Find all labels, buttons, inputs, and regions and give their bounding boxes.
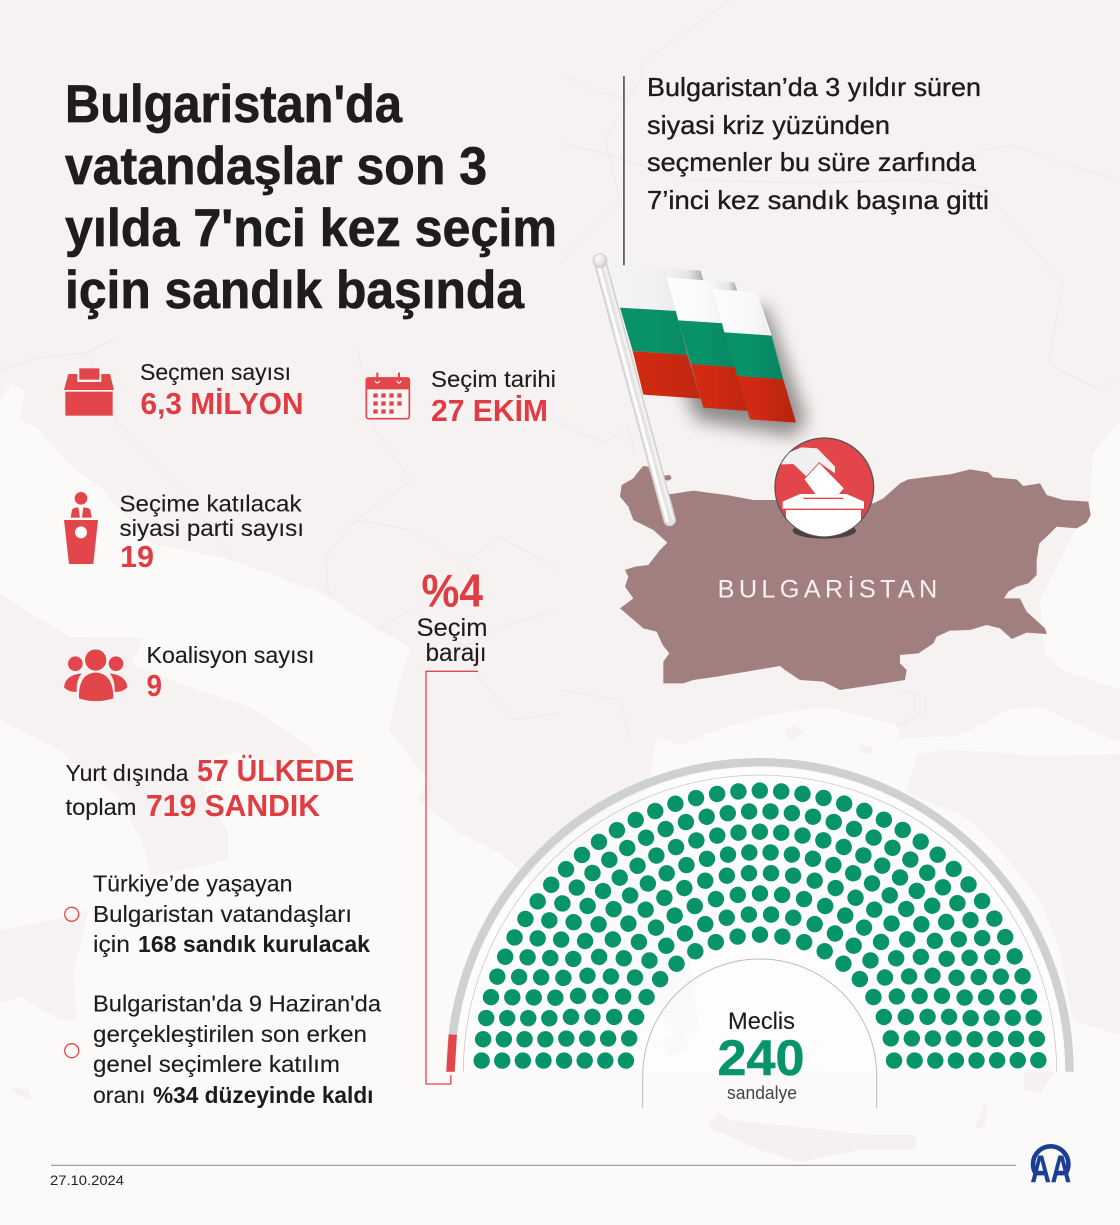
- note: turnout: gerçekleştirilen son erken: [93, 1021, 367, 1047]
- seat total: [718, 1008, 804, 1103]
- seat dots: [482, 791, 1038, 1061]
- icon: AA logo: AA: [1030, 1149, 1071, 1191]
- chart: parliament seats: [446, 762, 1070, 1108]
- intro text block: siyasi kriz yüzünden: [647, 110, 890, 140]
- stat: parties: 19: [120, 539, 154, 574]
- note: Türkiye ballot boxes: 168 sandık kurulacak: [138, 931, 370, 957]
- note: turnout: [65, 990, 381, 1108]
- date: 27.10.2024: [50, 1173, 125, 1188]
- title: vatandaşlar son 3: [65, 137, 487, 196]
- stat: election date: 27 EKİM: [431, 393, 548, 428]
- note: turnout: oranı: [93, 1082, 146, 1108]
- note: Türkiye ballot boxes: için: [93, 931, 130, 957]
- note: Türkiye ballot boxes: Bulgaristan vatandaşları: [93, 901, 352, 927]
- callout: election threshold: barajı: [426, 639, 486, 667]
- intro text block: 7’inci kez sandık başına gitti: [647, 185, 989, 215]
- callout: election threshold: [416, 564, 488, 1084]
- note: turnout: %34 düzeyinde kaldı: [153, 1082, 374, 1108]
- callout: election threshold: %4: [422, 564, 483, 616]
- stat: parties: [64, 490, 304, 574]
- note: turnout: Bulgaristan'da 9 Haziran'da: [93, 990, 381, 1016]
- stat: voters: 6,3 MİLYON: [140, 386, 304, 421]
- icon: podium: [64, 492, 98, 564]
- stat: parties: Seçime katılacak: [120, 490, 302, 516]
- map label: BULGARİSTAN: [718, 574, 937, 603]
- title: için sandık başında: [65, 261, 524, 320]
- stat: voters: Seçmen sayısı: [140, 359, 291, 385]
- icon: ballot box: [64, 368, 114, 416]
- flag cloth: [608, 264, 796, 423]
- stat: abroad ballot boxes: 57 ÜLKEDE: [197, 753, 354, 788]
- bullet: [65, 907, 79, 921]
- icon: people: [64, 648, 127, 701]
- intro text block: Bulgaristan’da 3 yıldır süren: [647, 72, 981, 102]
- stat: abroad ballot boxes: 719 SANDIK: [146, 788, 321, 823]
- stat: abroad ballot boxes: toplam: [66, 794, 136, 820]
- stat: election date: [366, 366, 556, 428]
- intro text block: seçmenler bu süre zarfında: [647, 147, 977, 177]
- note: turnout: genel seçimlere katılım: [93, 1051, 340, 1077]
- map: Bulgaria: [620, 466, 1091, 690]
- stat: coalitions: Koalisyon sayısı: [146, 642, 314, 668]
- outer arc: [450, 762, 1070, 1072]
- icon: calendar: [366, 373, 410, 419]
- stat: coalitions: [64, 642, 314, 703]
- intro text block: [623, 72, 989, 266]
- title: [65, 75, 557, 320]
- stat: abroad ballot boxes: [66, 753, 354, 823]
- stat: election date: Seçim tarihi: [431, 366, 556, 392]
- title: yılda 7'nci kez seçim: [65, 199, 557, 258]
- callout: election threshold: Seçim: [416, 614, 488, 642]
- threshold segment: [446, 1034, 457, 1072]
- note: Türkiye ballot boxes: [65, 870, 370, 957]
- seat total: Meclis: [728, 1008, 795, 1035]
- stat: abroad ballot boxes: Yurt dışında: [66, 760, 189, 786]
- stat: parties: siyasi parti sayısı: [120, 515, 304, 541]
- inner arc: [643, 959, 877, 1108]
- seat total: 240: [718, 1030, 804, 1086]
- footer rule: [51, 1165, 1016, 1166]
- flag pole: [593, 254, 673, 521]
- note: Türkiye ballot boxes: Türkiye’de yaşayan: [93, 870, 292, 896]
- bracket: [426, 671, 478, 1084]
- bullet: [65, 1044, 79, 1058]
- icon: Bulgarian flag: [593, 254, 807, 521]
- title: Bulgaristan'da: [65, 75, 402, 134]
- stat: voters: [64, 359, 303, 421]
- stat: coalitions: 9: [146, 668, 162, 703]
- seat total: sandalye: [727, 1083, 797, 1103]
- icon: ballot circle: [775, 438, 874, 539]
